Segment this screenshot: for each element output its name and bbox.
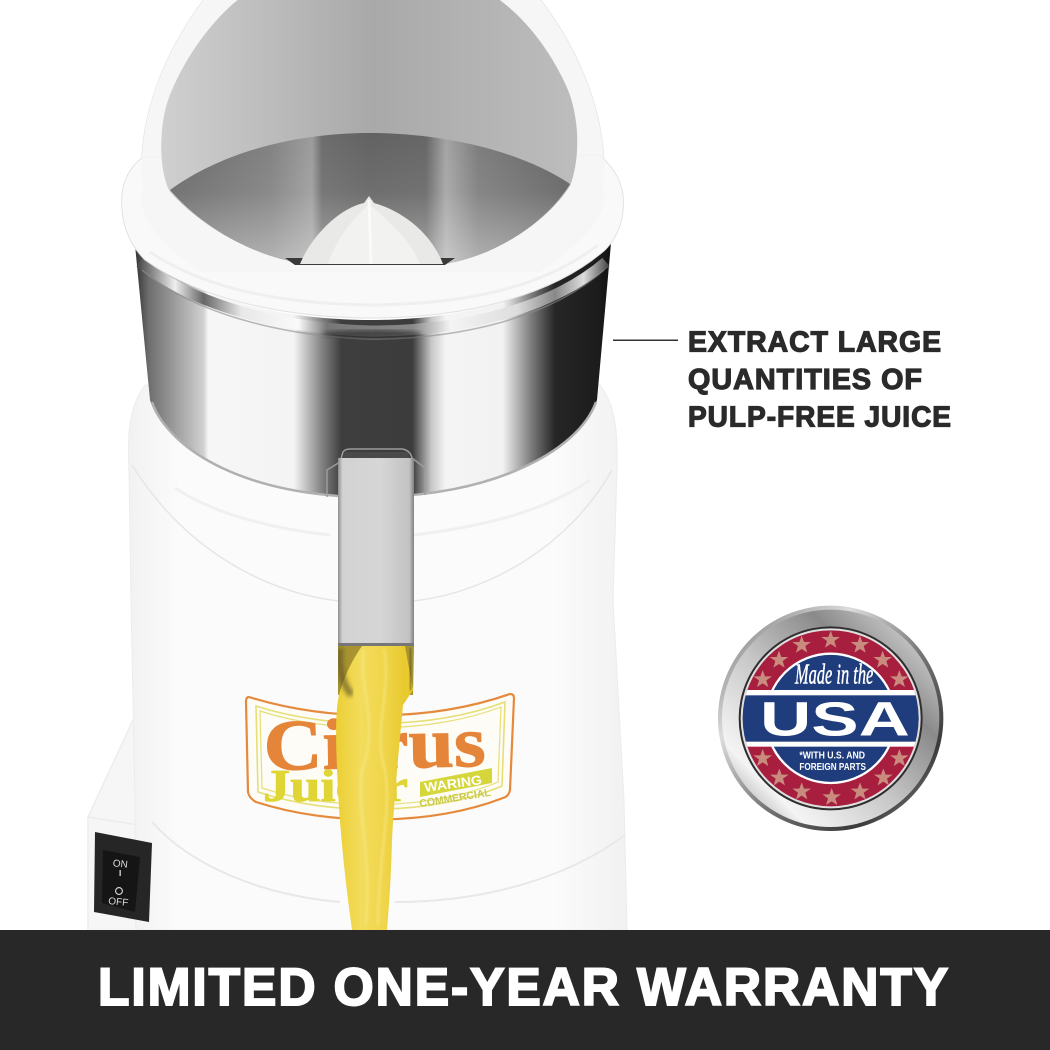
steel bowl interior	[170, 133, 570, 265]
callout text: QUANTITIES OF	[688, 364, 923, 396]
power rocker switch	[94, 832, 152, 922]
callout text	[688, 326, 952, 434]
badge script heading: Made in the	[794, 659, 873, 690]
spout	[327, 449, 425, 695]
lid hood	[142, 0, 604, 190]
callout text: PULP-FREE JUICE	[688, 402, 952, 434]
banner text: LIMITED ONE-YEAR WARRANTY	[98, 958, 950, 1017]
lid opening	[161, 0, 577, 264]
badge small print: FOREIGN PARTS	[799, 762, 866, 773]
base block behind body	[88, 720, 160, 930]
callout: extract large quantities	[613, 326, 952, 434]
badge USA wordmark: USA	[760, 692, 910, 746]
label wordmark: Citrus: Citrus	[263, 702, 486, 786]
reamer cone	[300, 196, 443, 264]
juicer product photo	[88, 0, 627, 930]
motor housing body	[128, 385, 627, 930]
power rocker switch: ON	[112, 858, 128, 871]
badge small print	[799, 750, 866, 773]
callout text: EXTRACT LARGE	[688, 326, 942, 358]
callout leader line	[613, 340, 678, 341]
badge stars	[753, 631, 909, 805]
badge small print: *WITH U.S. AND	[799, 750, 865, 761]
steel band	[135, 243, 611, 497]
citrus juicer label	[246, 694, 514, 820]
badge band	[740, 690, 922, 747]
juice stream	[336, 646, 413, 930]
waring commercial logo	[419, 768, 492, 810]
waring commercial logo: COMMERCIAL	[419, 787, 492, 810]
lid rim	[122, 0, 623, 318]
label wordmark: Juicer: Juicer	[263, 761, 408, 811]
footer banner	[0, 930, 1050, 1050]
power rocker switch: OFF	[108, 896, 129, 909]
waring commercial logo: WARING	[423, 772, 483, 795]
made in the USA badge	[718, 606, 943, 831]
